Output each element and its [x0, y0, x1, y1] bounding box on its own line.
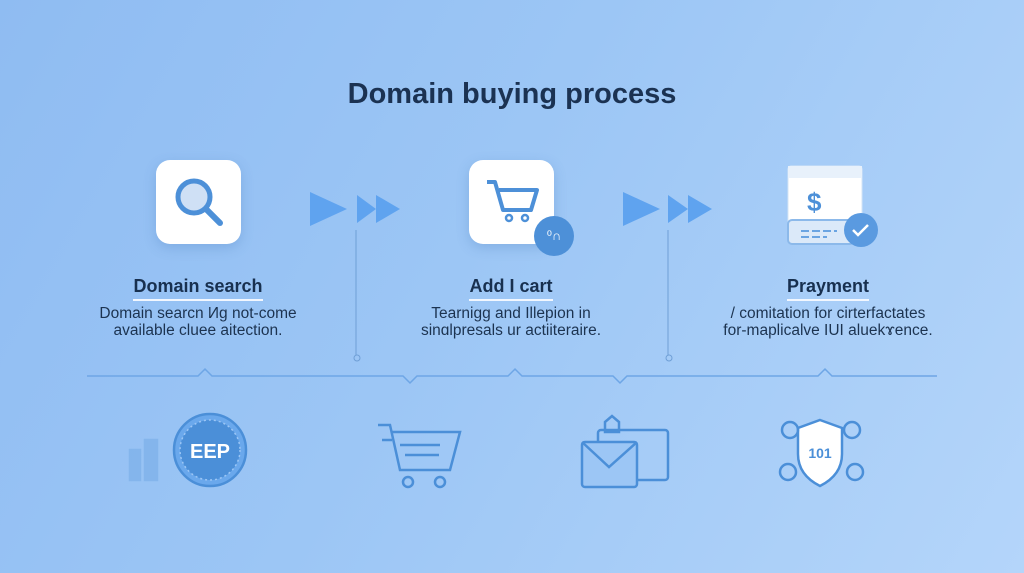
text: Domain searcn Иg not-come [99, 305, 297, 322]
step 1 text: Domain search [133, 276, 263, 296]
bottom icons [128, 412, 864, 488]
badge: ⁰∩ [547, 228, 561, 243]
text: Tearnigg and Illepion in [431, 305, 591, 322]
timeline [87, 368, 937, 384]
icon: cart [469, 160, 554, 244]
title: Domain buying process [348, 78, 676, 110]
text: sinɑlpresals ur actiiteraire. [421, 322, 601, 339]
bottom icons: EEP [190, 441, 230, 463]
badge [534, 216, 574, 256]
icon: payment: $ [807, 187, 822, 217]
text: / comitation for cirterfactates [731, 305, 925, 322]
icon: search [156, 160, 241, 244]
text: for-maplicalve IUI aluekɤence. [723, 322, 933, 339]
text: available cluee aitection. [114, 322, 282, 339]
bottom icons: 101 [808, 445, 832, 461]
arrows [310, 192, 712, 362]
icon: payment [787, 166, 878, 247]
step 2 text: Add I cart [469, 276, 552, 296]
step 3 text: Prayment [787, 276, 869, 296]
